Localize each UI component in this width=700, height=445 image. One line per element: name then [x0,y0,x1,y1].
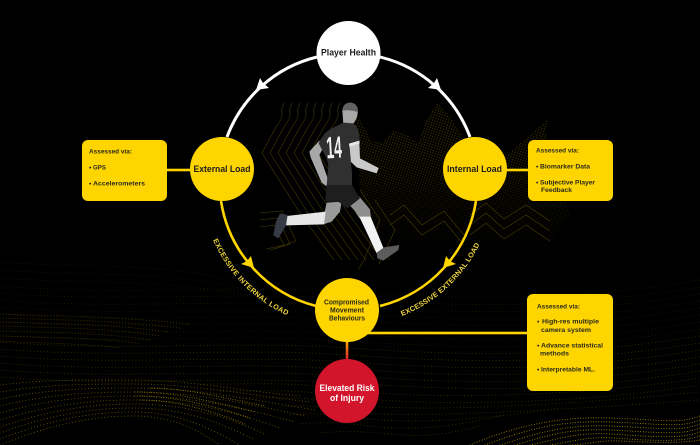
panel: movement behaviours assessment: camera system [541,327,591,334]
node: compromised movement behaviours: Compromised [324,298,369,306]
panel: movement behaviours assessment: Interpretable ML. [541,366,595,373]
ring arc: internal load to compromised movement [380,201,476,306]
arrow: to external load [256,78,269,90]
dotted wave floor: faint rows [0,262,700,347]
panel: external load assessment: • [89,164,92,171]
panel: external load assessment: Accelerometers [93,180,145,187]
node: player health [316,21,380,85]
connector: compromised movement to elevated risk [346,340,348,361]
panel: movement behaviours assessment: High-res multiple [542,318,599,325]
panel: movement behaviours assessment: Assessed via: [537,303,580,310]
shorts [325,185,360,208]
curved label: excessive internal load: EXCESSIVE INTERNAL LOAD [213,238,288,314]
node: compromised movement behaviours: Movement [330,306,364,314]
connector: internal load to box [505,169,530,171]
arrow: to internal load [428,78,441,90]
panel: external load assessment [82,140,167,201]
head [342,103,358,124]
ring arc: external load to compromised movement [221,201,316,306]
dotted wave floor: mid rows [0,336,700,435]
front leg [349,197,399,261]
right arm [349,142,379,173]
back leg [273,202,342,238]
panel: external load assessment: • [89,180,92,187]
panel: internal load assessment: Subjective Player [540,179,595,186]
dotted wave floor: bottom right [470,416,700,445]
node: external load [190,137,254,201]
contour lines behind player [260,103,550,270]
arrow: excessive internal load [241,256,254,268]
node: internal load [443,137,507,201]
node: elevated risk of injury [315,359,379,423]
jersey [319,123,360,186]
node: compromised movement behaviours: Behaviours [329,314,365,322]
player figure [273,103,399,261]
panel: movement behaviours assessment [527,294,613,391]
dotted wave floor: arching rows [0,380,315,445]
arrow: excessive external load [443,256,456,268]
panel: movement behaviours assessment: • [537,318,540,325]
node: elevated risk of injury: of Injury [330,393,365,403]
panel: internal load assessment [528,140,613,201]
node: external load: External Load [194,163,251,174]
panel: internal load assessment: • [536,179,539,186]
panel: external load assessment: GPS [93,164,106,171]
left arm [309,141,328,187]
node: internal load: Internal Load [447,163,502,174]
player figure: 14 [326,131,343,165]
connector: external load to box [166,169,192,171]
panel: internal load assessment: Feedback [541,187,572,194]
connector: compromised movement to box [368,332,529,334]
ring arc: player health to external load [227,57,317,137]
panel: movement behaviours assessment: • [537,366,540,373]
panel: movement behaviours assessment: methods [540,350,569,358]
sleeve stripe [349,141,360,147]
node: compromised movement behaviours [315,278,379,342]
dotted mountain behind player [356,103,570,238]
ring arc: player health to internal load [380,57,470,137]
dotted wave floor: left band [0,314,190,348]
panel: internal load assessment: • [536,163,539,170]
panel: movement behaviours assessment: Advance statistical [541,342,603,349]
panel: internal load assessment: Assessed via: [536,148,579,154]
curved label: excessive external load: EXCESSIVE EXTERNAL LOAD [400,243,479,316]
panel: external load assessment: Assessed via: [89,148,132,155]
dotted wave floor: bright crest [135,388,265,424]
node: elevated risk of injury: Elevated Risk [320,383,375,393]
panel: movement behaviours assessment: • [537,342,540,349]
panel: internal load assessment: Biomarker Data [540,163,590,170]
node: player health: Player Health [321,46,376,58]
